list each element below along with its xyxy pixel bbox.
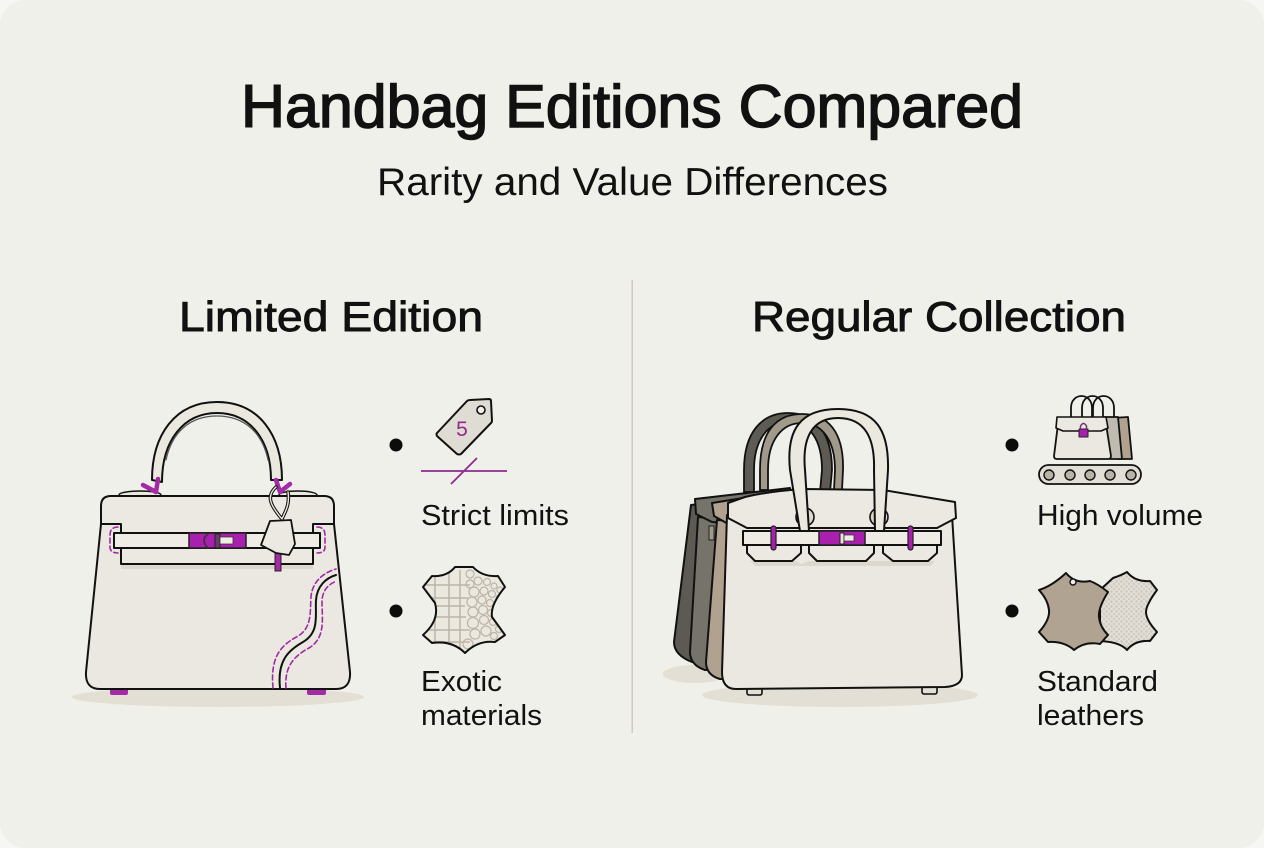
clochette — [261, 487, 295, 571]
back bag: gray — [690, 517, 740, 670]
main bag body — [722, 515, 962, 689]
bullet: high volume — [1006, 438, 1018, 452]
back bag: tan — [706, 520, 745, 679]
label: exotic materials: materials — [421, 700, 542, 732]
stitching — [110, 527, 337, 688]
bullet: standard leathers — [1006, 604, 1018, 618]
icon: bags on conveyor — [1039, 396, 1141, 484]
bullet: strict limits — [390, 438, 402, 452]
icon: exotic leather hide — [420, 567, 505, 653]
label: high volume: High volume — [1037, 500, 1203, 532]
bag body — [86, 524, 350, 689]
label: exotic materials — [421, 666, 542, 732]
clasp — [819, 531, 865, 545]
heading: regular collection: Regular Collection — [752, 293, 1126, 340]
strap tabs — [747, 545, 801, 561]
icon: numbered tag: 5 — [456, 418, 468, 441]
label: exotic materials: Exotic — [421, 666, 502, 698]
icon: standard leather hides — [1039, 572, 1157, 650]
back handles — [744, 413, 832, 492]
clasp — [189, 533, 246, 548]
back bag: dark — [674, 504, 725, 662]
main bag flap — [728, 489, 956, 528]
label: strict limits: Strict limits — [421, 500, 569, 532]
strap keepers — [771, 526, 776, 550]
front handle — [789, 409, 888, 531]
title: Handbag Editions Compared — [241, 73, 1023, 140]
icon: numbered tag — [421, 399, 507, 484]
label: standard leathers: Standard — [1037, 666, 1158, 698]
illustration: regular collection bags — [663, 409, 978, 707]
illustration: limited edition bag — [72, 402, 364, 707]
main bag feet — [747, 687, 762, 695]
label: standard leathers: leathers — [1037, 700, 1144, 732]
purple rings — [143, 479, 158, 492]
wave seam — [280, 575, 336, 688]
bag handle — [152, 402, 282, 482]
subtitle: Rarity and Value Differences — [377, 161, 888, 204]
strap — [114, 533, 320, 548]
bullet: exotic materials — [390, 604, 402, 618]
strap — [743, 531, 941, 545]
heading: limited edition: Limited Edition — [179, 293, 483, 340]
label: standard leathers — [1037, 666, 1158, 732]
bag flap — [101, 496, 334, 564]
